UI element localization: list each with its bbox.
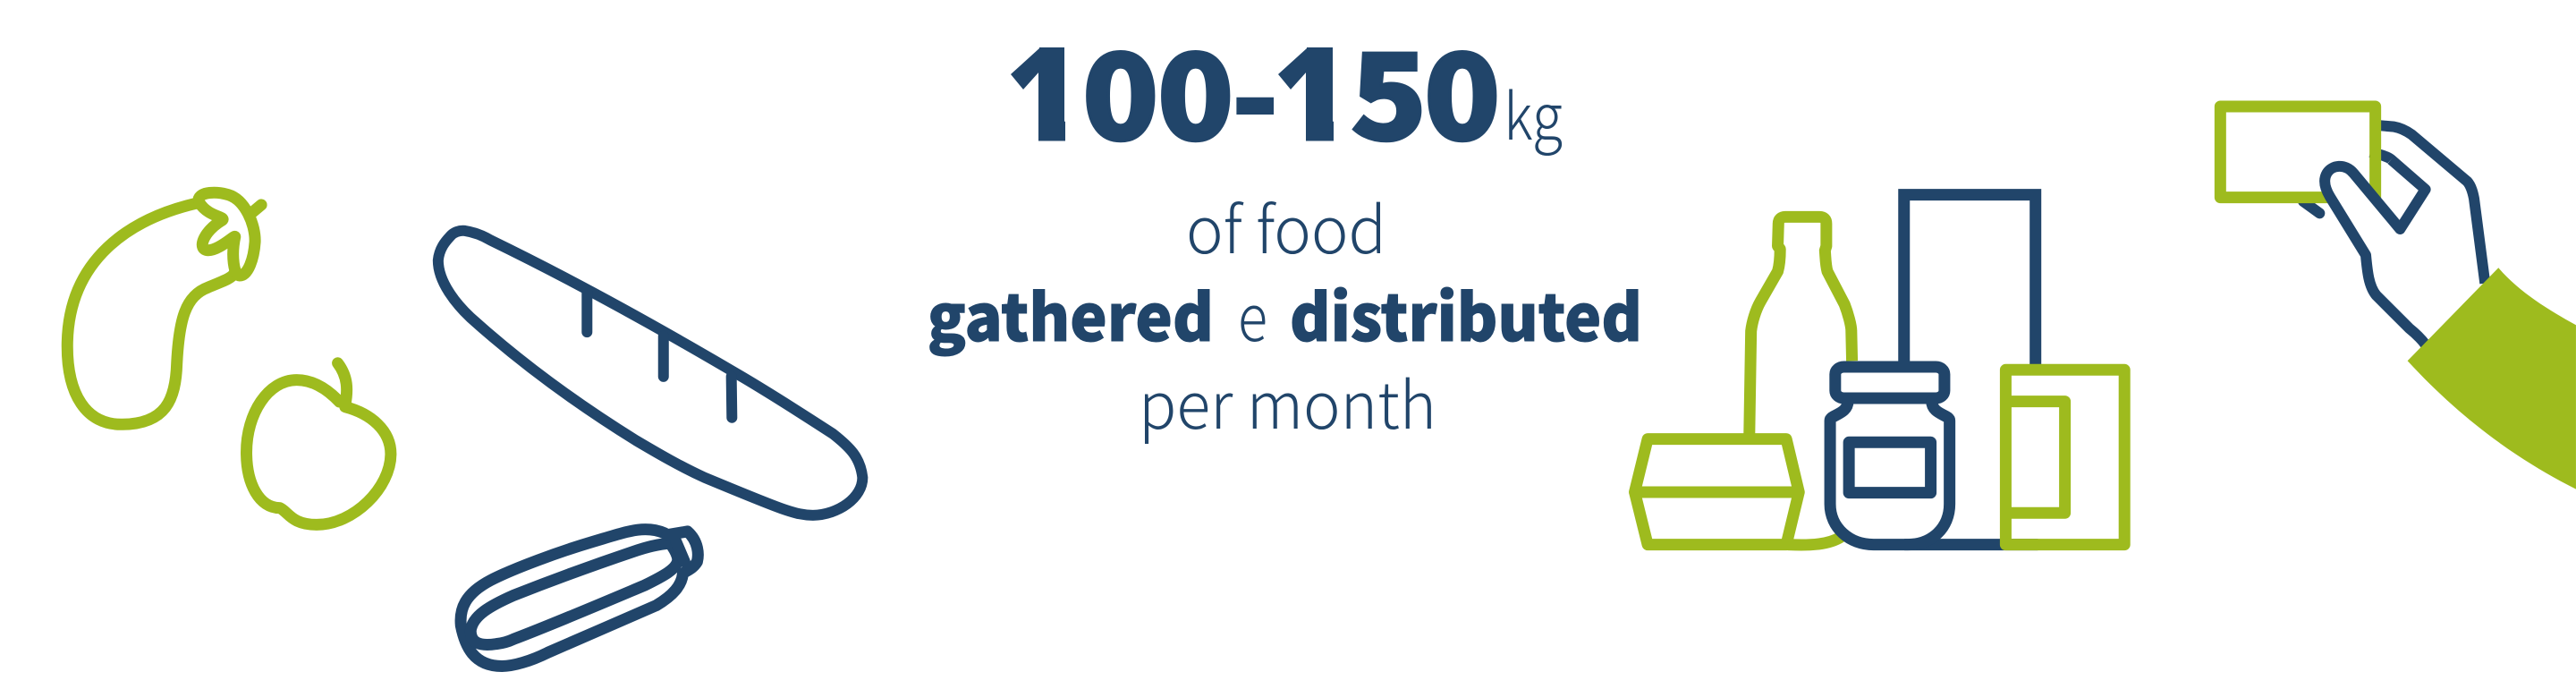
e: e [1238, 266, 1267, 360]
bottle [1750, 217, 1852, 545]
heading: 100-150 kg [1005, 4, 1563, 173]
icon: apple [247, 363, 391, 524]
takeaway box [1635, 439, 1799, 545]
card corner behind thumb [2303, 201, 2319, 213]
icon: eggplant [67, 192, 261, 424]
sleeve [2408, 268, 2576, 489]
jar body [1830, 401, 1950, 545]
text: per month: per month [1139, 353, 1436, 447]
distributed: distributed [1290, 266, 1642, 360]
jar label [1849, 442, 1931, 493]
hand outline [2370, 124, 2485, 284]
thumb fill [2325, 166, 2400, 255]
icon: hand holding card [2220, 106, 2576, 489]
icon: groceries [1635, 195, 2124, 545]
icon: zucchini [461, 530, 698, 666]
tall carton [1904, 195, 2038, 545]
finger base [2370, 152, 2391, 159]
unit: kg [1504, 67, 1563, 158]
gathered: gathered [928, 266, 1214, 360]
big number: 100-150 [1010, 4, 1501, 173]
card [2220, 106, 2376, 198]
text: gathered e distributed [928, 266, 1642, 360]
text: of food: of food [1186, 178, 1386, 272]
jar lid [1835, 367, 1945, 398]
icon: baguette [438, 231, 862, 515]
finger, thumb and wrist outline [2325, 159, 2426, 344]
small box [2005, 370, 2124, 545]
